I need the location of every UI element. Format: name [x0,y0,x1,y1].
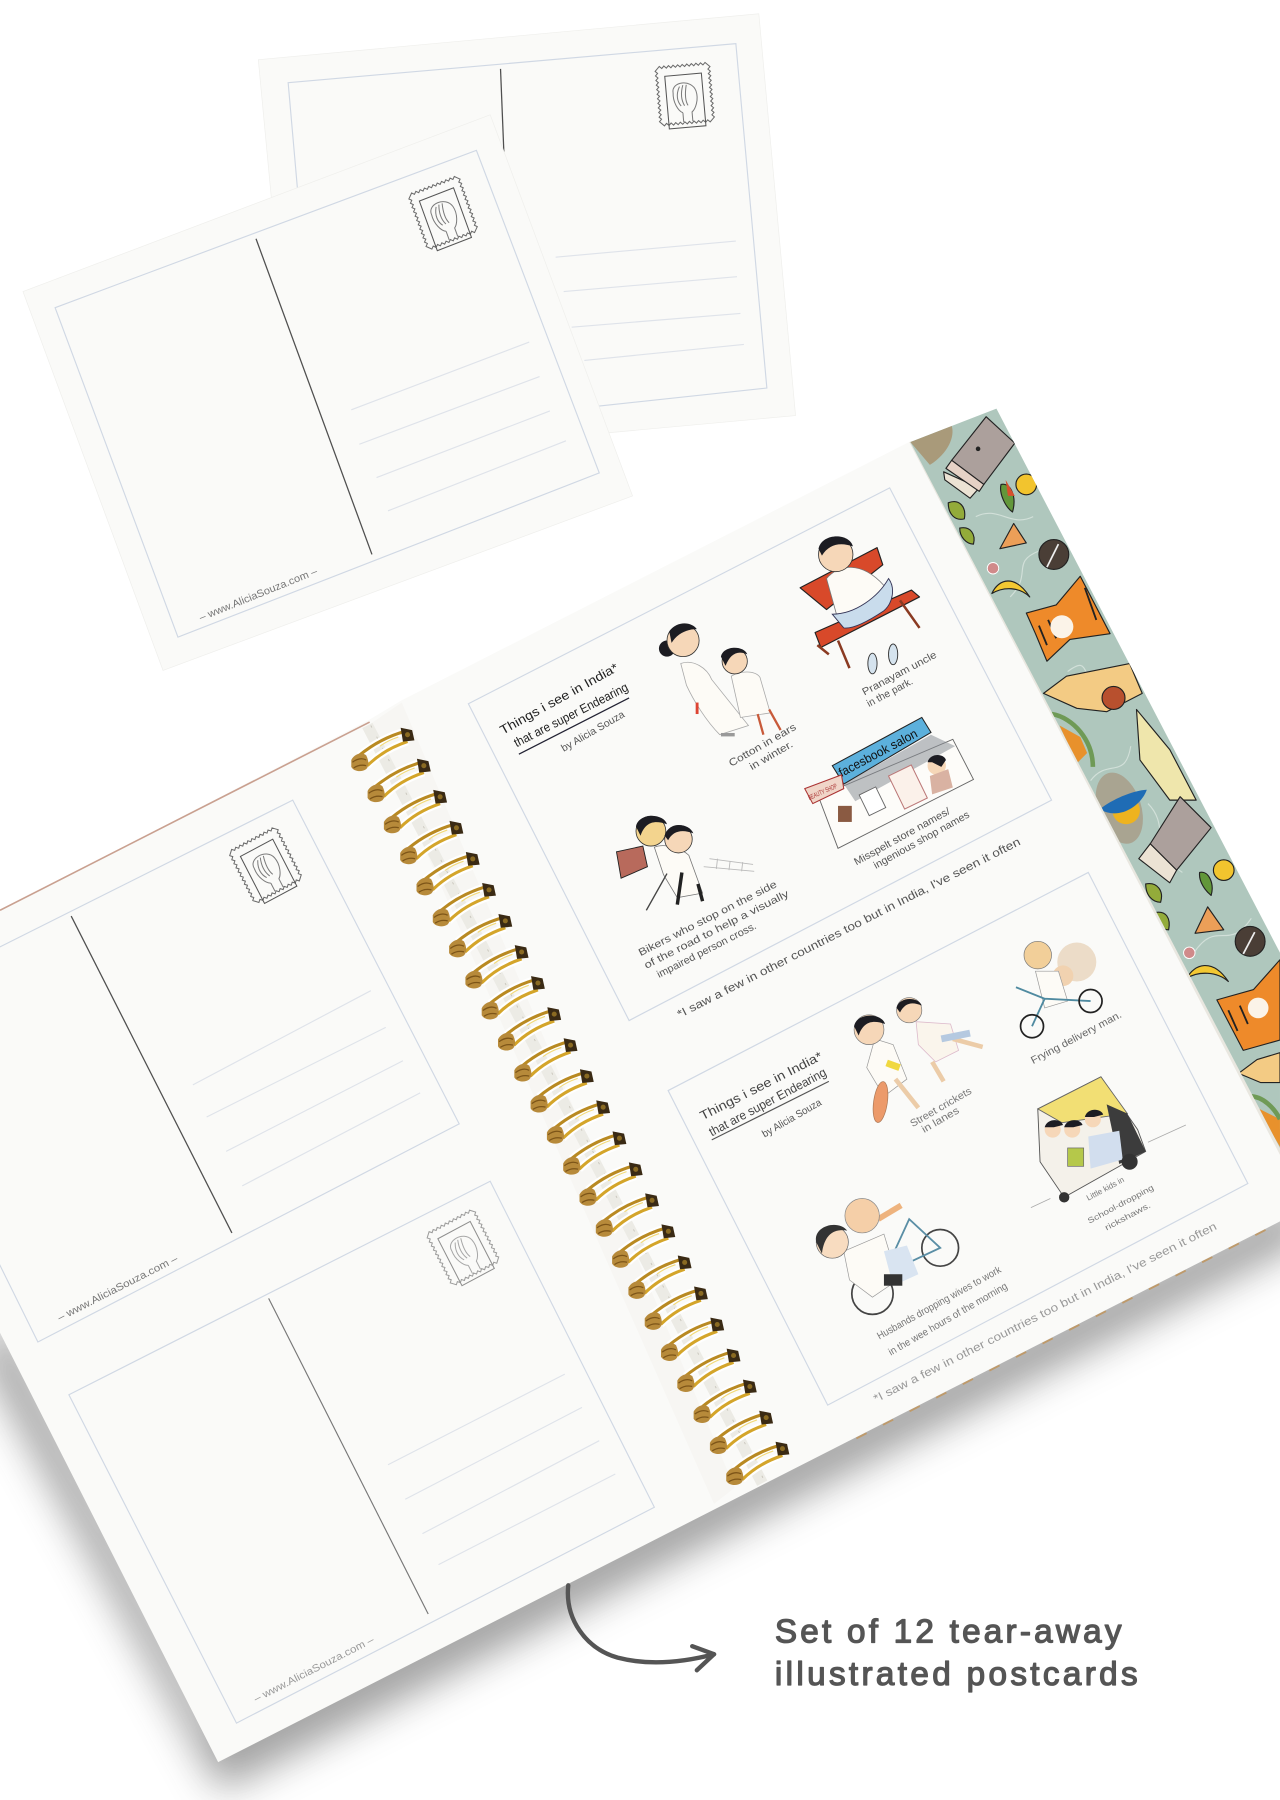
illustration: mother and child [659,623,798,773]
icon: tiger [1026,576,1110,661]
heading: by Alicia Souza [560,709,627,755]
icon: auto roof [1136,709,1196,800]
icon: horn [1039,540,1069,569]
footnote bottom: *I saw a few in other countries too but in India, I've seen it often [872,1221,1219,1405]
illustration: auto rickshaw: Little kids in [1085,1175,1126,1203]
illustration: street cricket: in lanes [920,1105,961,1136]
icon: flower [987,562,999,574]
illustration: husband and wife on bicycle: Husbands dropping wives to work [875,1264,1004,1342]
postcard website: – www.AliciaSouza.com – [198,566,319,624]
heading: Things i see in India* [698,1049,825,1123]
illustration: bikers helping: Bikers who stop on the side [637,879,779,959]
icon: peacock [1096,772,1147,844]
icon: leaf [1155,912,1169,930]
icon: banana [992,581,1030,597]
icon: patterned blob [910,426,953,465]
panel: left page top postcard: – www.AliciaSouza.com – [56,1254,180,1324]
illustration: shop signs [805,717,973,872]
illustration: bikers helping [616,816,792,981]
heading: that are super Endearing [707,1065,829,1139]
heading: Things i see in India* [497,660,621,737]
icon: cricket bat [1239,1053,1280,1083]
illustration: auto rickshaw: rickshaws. [1103,1201,1152,1232]
icon: horn [1235,926,1265,956]
illustration: bikers helping: of the road to help a visually [643,888,792,972]
icon: leaf [1146,884,1161,902]
icon: flower [1184,947,1195,959]
illustration: bikers helping: impaired person cross. [655,921,758,981]
icon: orange and green shape [1250,1096,1280,1147]
illustration: husband and wife on bicycle [816,1198,1010,1358]
page thickness edge [909,441,1280,1155]
icon: suitcase [944,417,1015,498]
illustration: shop signs: facesbook salon [836,726,920,780]
illustration: street cricket [854,998,983,1136]
illustration: pranayam uncle [800,536,939,710]
caption: illustrated postcards [775,1656,1138,1693]
heading: that are super Endearing [512,680,630,750]
front postcard [23,115,633,670]
icon: vegetables [1200,860,1234,895]
icon: orange and green shape [1052,714,1093,767]
panel: left page bottom postcard [69,1181,654,1723]
patterned cover strip [910,409,1280,1148]
icon: cricket bat [1044,664,1142,712]
notebook shadow [0,1194,1280,1791]
caption: Set of 12 tear-away [775,1614,1122,1651]
illustration: mother and child: in winter. [748,739,795,773]
footnote top: *I saw a few in other countries too but in India, I've seen it often [676,836,1023,1021]
illustration: delivery man [1016,941,1124,1067]
illustration: auto rickshaw [1031,1077,1186,1232]
caption [775,1614,1138,1693]
panel: right page top illustrations [468,488,1052,1021]
back postcard [258,14,796,461]
panel: left page top postcard [0,800,459,1342]
icon: samosa [1195,907,1224,933]
illustration: shop signs: ingenious shop names [872,810,972,872]
spiral binding [351,726,789,1485]
illustration: shop signs: BEAUTY SHOP [807,783,839,802]
panel: left page bottom postcard: – www.AliciaSouza.com – [252,1635,376,1705]
illustration: delivery man: Frying delivery man. [1029,1010,1124,1067]
arrow [568,1585,714,1670]
icon: suitcase [1139,797,1211,883]
icon: samosa [1000,523,1026,549]
heading [497,660,630,755]
icon: banana [1187,966,1228,982]
illustration: street cricket: Street crickets [909,1086,974,1130]
panel: right page bottom illustrations [668,872,1248,1405]
icon: leaf [960,528,974,544]
illustration: shop signs: Misspelt store names/ [853,806,952,868]
illustration: husband and wife on bicycle: in the wee hours of the morning [887,1281,1010,1358]
illustration: mother and child: Cotton in ears [727,722,798,769]
illustration: auto rickshaw: School-dropping [1086,1183,1155,1225]
spine margin [370,703,735,1504]
icon: tiger [1217,960,1280,1050]
illustration: pranayam uncle: Pranayam uncle [861,650,939,698]
icon: vegetables [1001,474,1037,512]
icon: leaf [948,502,965,519]
heading: by Alicia Souza [761,1097,824,1140]
illustration: pranayam uncle: in the park. [865,676,915,710]
open notebook [0,409,1280,1762]
cover edge [0,722,370,910]
